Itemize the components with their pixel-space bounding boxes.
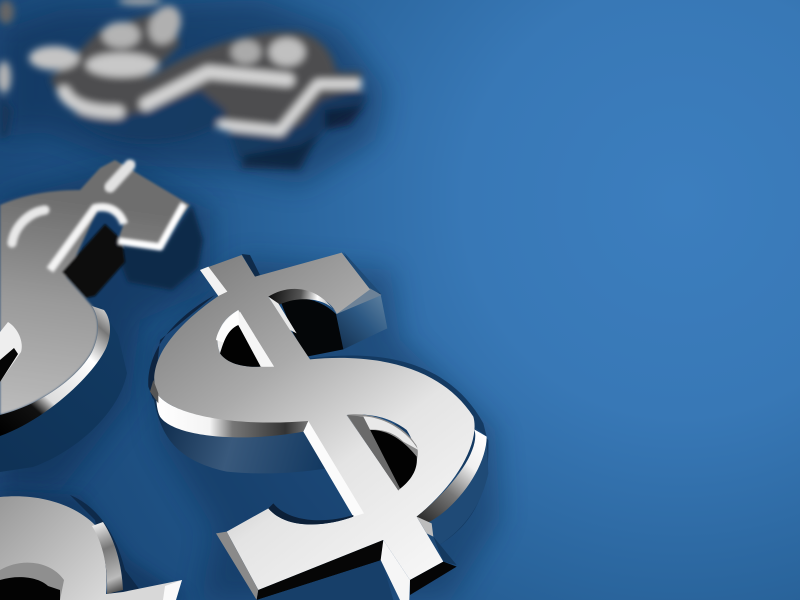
hole	[0, 563, 64, 600]
icon: bottom-left dollar sign	[0, 495, 182, 600]
extruded side	[0, 305, 127, 472]
white highlight lines	[118, 204, 184, 247]
strike top highlight	[200, 267, 227, 296]
soft shadows	[0, 0, 500, 600]
bottom arm underside	[257, 540, 383, 600]
upper arm block	[112, 205, 203, 290]
lower hole	[0, 322, 22, 382]
rim bevel	[92, 522, 123, 594]
back dark edge	[148, 295, 215, 400]
top face	[154, 253, 475, 590]
lower-left bevel	[156, 393, 308, 437]
white corner	[163, 580, 182, 600]
strike bottom bevel	[381, 540, 410, 600]
icon: middle-left dollar sign	[0, 160, 203, 472]
extruded side	[153, 390, 488, 548]
top arm block	[280, 252, 387, 357]
icon: blurred far-left dollar fragments	[0, 0, 162, 140]
top-arm curve bevel	[268, 289, 337, 314]
lower hole	[347, 414, 418, 491]
icon: main chrome dollar sign	[148, 252, 488, 600]
inner hole	[62, 224, 125, 298]
top face	[0, 160, 190, 415]
icon: blurred rear dollar sign	[29, 1, 368, 170]
rim bevel	[0, 306, 110, 436]
strike lower-left bevel	[303, 421, 364, 517]
bottom arm left bevel	[216, 532, 258, 600]
right rim bevel	[417, 429, 487, 525]
upper hole	[216, 310, 274, 367]
bottom curve inner edge	[268, 503, 353, 524]
